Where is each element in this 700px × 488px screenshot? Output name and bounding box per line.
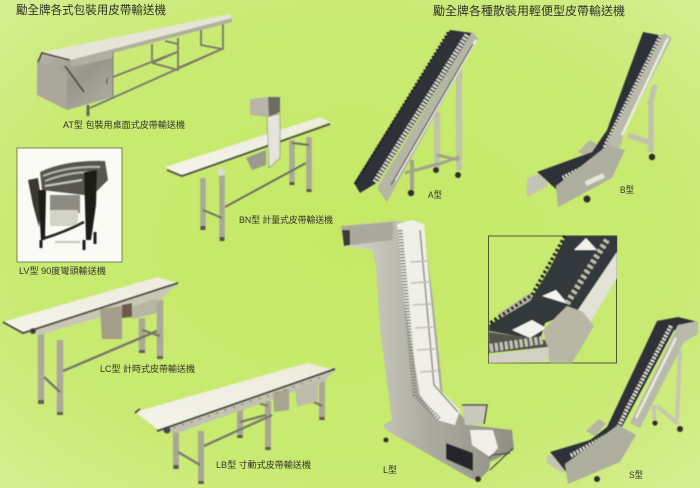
caption: BN type: BN型 計量式皮帶輸送機: [239, 214, 333, 225]
conveyor: A type: [354, 30, 478, 202]
panel: LV type photo: [17, 148, 122, 262]
conveyor: B type: [527, 32, 672, 207]
conveyor: AT type: [37, 14, 232, 116]
caption: B type: B型: [620, 185, 634, 195]
caption: L type: L型: [383, 465, 397, 475]
caption: LV type: LV型 90度彎頭輸送機: [19, 265, 106, 276]
caption: LC type: LC型 計時式皮帶輸送機: [100, 363, 195, 374]
inset photo of cleated belt: [489, 236, 617, 363]
conveyor: L type: [341, 220, 514, 482]
panel: detail inset: [488, 236, 617, 363]
caption: S type: S型: [629, 470, 643, 480]
conveyor: LC type: [3, 277, 178, 415]
conveyor: LB type: [135, 363, 335, 484]
heading: packaging conveyors: 勵全牌各式包裝用皮帶輸送機: [16, 2, 166, 17]
conveyor: S type: [547, 317, 698, 484]
caption: A type: A型: [428, 190, 442, 200]
conveyor: BN type: [165, 97, 330, 241]
icon: LV curved conveyor: [28, 161, 108, 250]
caption: LB type: LB型 寸動式皮帶輸送機: [216, 459, 311, 470]
caption: AT type: AT型 包裝用桌面式皮帶輸送機: [63, 119, 185, 130]
heading: bulk conveyors: 勵全牌各種散裝用輕便型皮帶輸送機: [433, 3, 625, 18]
